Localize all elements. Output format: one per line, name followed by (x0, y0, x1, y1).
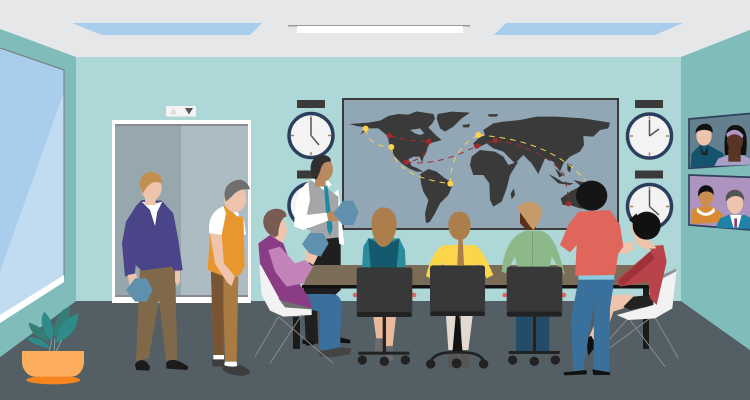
woman in yellow (426, 212, 493, 368)
floor (0, 301, 750, 400)
screen 2 (689, 175, 750, 230)
elevator (112, 106, 251, 303)
person in green (502, 202, 565, 351)
woman in teal (362, 207, 406, 361)
clock: left bottom (289, 170, 333, 228)
person: seated woman in red at right (587, 212, 678, 367)
person: seated man with hexagon tablet (255, 209, 352, 363)
video screens (689, 113, 750, 230)
left wall with window (0, 29, 76, 357)
clock: right top (628, 100, 672, 158)
person: standing woman in red (560, 181, 623, 375)
office chair 3 (507, 267, 562, 366)
office chair 1 (357, 267, 412, 366)
office chair 2 (426, 265, 488, 369)
people seated with backs to viewer (353, 202, 566, 369)
person: man in orange vest (208, 180, 250, 376)
clock: left top (289, 100, 333, 158)
person: man in blue sweater with tablet (122, 172, 188, 371)
leaves (27, 307, 78, 352)
eurasia, africa and oceania (470, 114, 610, 210)
screen 1 (689, 113, 750, 168)
conference table (293, 265, 650, 349)
table end markers (353, 293, 566, 297)
pot (22, 351, 84, 384)
person: presenter in grey vest (294, 155, 359, 346)
americas (349, 111, 470, 223)
clock: right bottom (628, 170, 672, 228)
flight routes (366, 129, 585, 203)
right wall (681, 30, 750, 350)
ceiling (0, 0, 750, 57)
plant (22, 307, 84, 384)
world map (343, 99, 618, 229)
route markers (363, 126, 571, 206)
